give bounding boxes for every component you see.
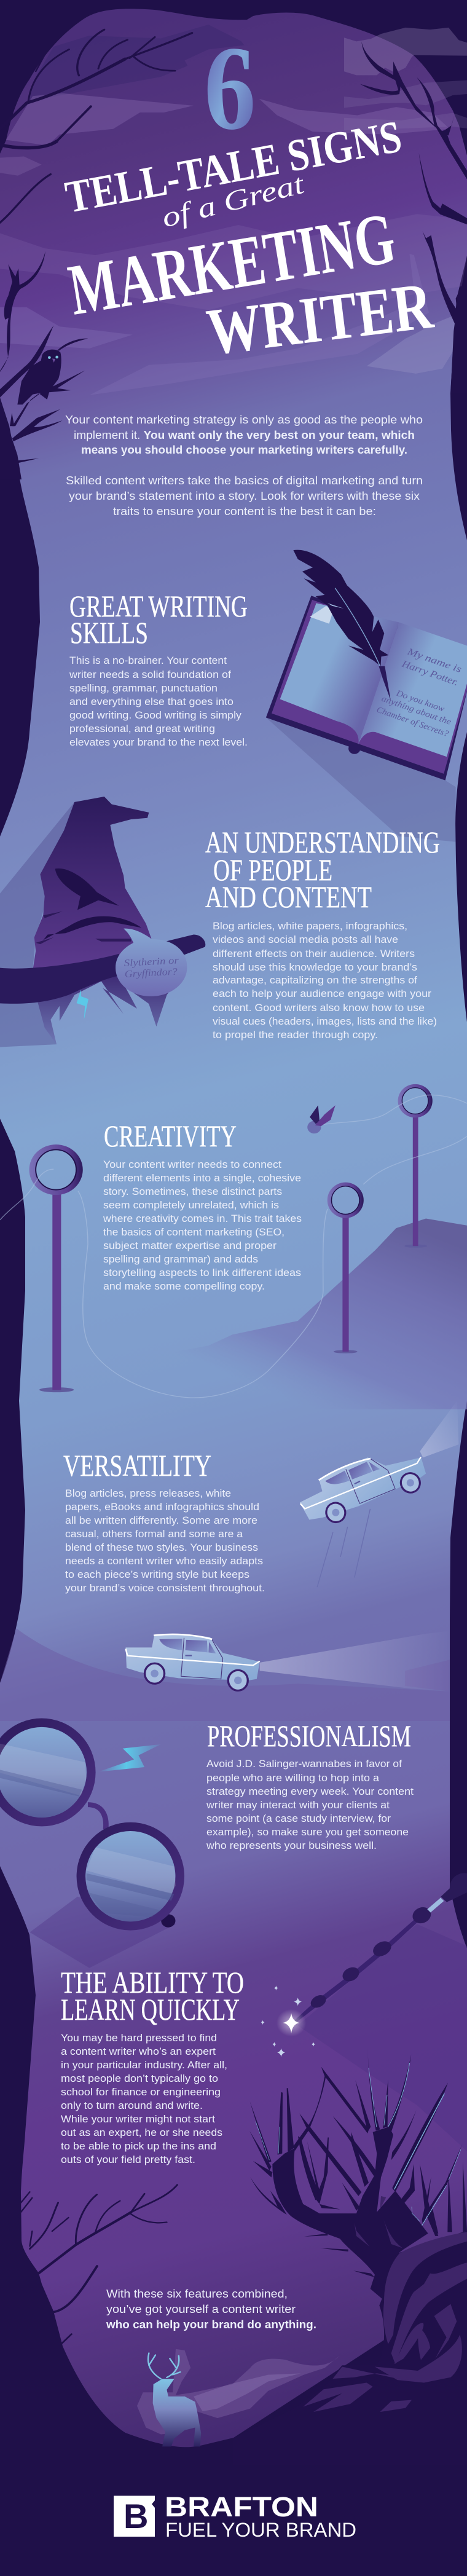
logo mark: B [124, 2497, 148, 2535]
body text: subject matter expertise and proper [103, 1240, 277, 1251]
body text: all be written differently. Some are more [65, 1515, 257, 1526]
tree: upper right branches and trunk [360, 41, 467, 393]
glowing twig highlights [256, 2063, 461, 2226]
heading: THE ABILITY TO [61, 1965, 244, 1999]
icon: wand with sparkles [261, 1873, 467, 2151]
body text: different effects on their audience. Writers [213, 948, 415, 959]
body text: blend of these two styles. Your business [65, 1542, 258, 1553]
body text: only to turn around and write. [61, 2100, 203, 2111]
intro text: Skilled content writers take the basics of digital marketing and turn [66, 474, 423, 487]
intro text: implement it. You want only the very best on your team, which [74, 428, 415, 441]
body text: example), so make sure you get someone [206, 1827, 409, 1838]
of a great: of a Great [159, 168, 308, 234]
heading: LEARN QUICKLY [61, 1992, 240, 2027]
body text: to each piece’s writing style but keeps [65, 1569, 249, 1580]
intro text: traits to ensure your content is the best it can be: [113, 505, 376, 518]
body text: and make some compelling copy. [103, 1281, 265, 1292]
body text [69, 655, 248, 748]
body text: papers, eBooks and infographics should [65, 1502, 259, 1513]
body text [213, 921, 437, 1041]
body text: This is a no-brainer. Your content [69, 655, 227, 666]
body text: strategy meeting every week. Your content [206, 1786, 414, 1797]
body text: your brand’s voice consistent throughout. [65, 1583, 265, 1594]
heading: OF PEOPLE [213, 853, 332, 887]
icon: flying car [294, 1433, 433, 1540]
book handwriting: My name is [406, 646, 463, 675]
body text: needs a content writer who easily adapts [65, 1556, 263, 1567]
flying car beam and streaks [317, 1401, 458, 1587]
heading: GREAT WRITING [69, 589, 248, 623]
body text [103, 1159, 302, 1292]
hill [89, 1219, 467, 1409]
hills [0, 1628, 450, 1721]
body text: to propel the reader through copy. [213, 1030, 378, 1041]
body text: outs of your field pretty fast. [61, 2154, 195, 2165]
heading: SKILLS [70, 615, 148, 650]
icon: owl [17, 350, 61, 404]
intro text: your brand’s statement into a story. Look for writers with these six [69, 489, 420, 502]
body text: different elements into a single, cohesive [103, 1173, 301, 1184]
heading: CREATIVITY [104, 1119, 237, 1153]
closing text: you’ve got yourself a content writer [106, 2302, 296, 2315]
body text [206, 1759, 414, 1851]
panel: great writing skills [69, 550, 467, 842]
heading [205, 825, 440, 914]
speech bubble text: Gryffindor? [124, 967, 178, 980]
body text: While your writer might not start [61, 2114, 215, 2125]
body text: and everything else that goes into [69, 696, 234, 707]
intro text: means you should choose your marketing writers carefully. [81, 443, 407, 456]
body text: Blog articles, white papers, infographics, [213, 921, 407, 932]
body text: most people don’t typically go to [61, 2073, 218, 2084]
root overlays [303, 2196, 467, 2412]
body text: story. Sometimes, these distinct parts [103, 1186, 282, 1197]
body text: writer needs a solid foundation of [69, 669, 231, 680]
tree and owl: left [0, 251, 88, 479]
body text: where creativity comes in. This trait takes [103, 1213, 302, 1224]
icon: sorting hat [0, 797, 205, 1047]
tree: lower left [21, 2185, 177, 2344]
body text: Blog articles, press releases, white [65, 1488, 231, 1499]
book handwriting: Do you know [394, 688, 446, 714]
body text: content. Good writers also know how to use [213, 1002, 425, 1014]
body text: out as an expert, he or she needs [61, 2127, 222, 2138]
panel: professionalism [0, 1719, 414, 1968]
body text: You may be hard pressed to find [61, 2033, 217, 2044]
body text: some point (a case study interview, for [206, 1813, 391, 1824]
body text: visual cues (headers, images, lists and the like) [213, 1016, 437, 1027]
icon: book and quill [266, 550, 467, 842]
heading: AND CONTENT [205, 880, 372, 914]
body text: seem completely unrelated, which is [103, 1200, 279, 1211]
clouds: upper right fog [344, 28, 467, 374]
body text: spelling and grammar) and adds [103, 1254, 258, 1265]
book handwriting: anything about the [380, 695, 452, 727]
heading [61, 1965, 244, 2027]
quidditch hoops [29, 1084, 433, 1392]
logo mark [114, 2495, 155, 2537]
body text: who represents your business well. [206, 1840, 377, 1851]
tree: whomping willow [234, 2049, 467, 2465]
icon: patronus stag [137, 2349, 340, 2446]
closing text [106, 2287, 316, 2331]
icon: glasses [0, 1719, 184, 1968]
body text: in your particular industry. After all, [61, 2060, 227, 2071]
icon: driving car [126, 1631, 450, 1692]
number 6: 6 [204, 21, 256, 155]
title [61, 21, 437, 369]
tell-tale signs: TELL-TALE SIGNS [61, 111, 406, 223]
panel: ability to learn quickly [61, 1873, 467, 2165]
body text: professional, and great writing [69, 723, 215, 735]
body text: Your content writer needs to connect [103, 1159, 281, 1170]
logo: brafton [114, 2491, 356, 2541]
body text [61, 2033, 227, 2165]
speech bubble text: Slytherin or [124, 955, 179, 969]
body text: casual, others formal and some are a [65, 1529, 243, 1540]
panel: versatility [0, 1401, 458, 1721]
panel: creativity [0, 1084, 467, 1409]
tagline: FUEL YOUR BRAND [165, 2519, 356, 2541]
body text: storytelling aspects to link different ideas [103, 1267, 301, 1278]
intro text [65, 413, 423, 518]
tree branches [0, 251, 88, 479]
body text: good writing. Good writing is simply [69, 710, 242, 721]
body text: advantage, capitalizing on the strengths of [213, 975, 417, 986]
body text: a content writer who’s an expert [61, 2046, 216, 2057]
tree: upper left [0, 30, 192, 225]
body text: people who are willing to hop into a [206, 1773, 380, 1784]
body text: each to help your audience engage with your [213, 988, 432, 999]
heading: VERSATILITY [63, 1448, 211, 1483]
closing text: who can help your brand do anything. [106, 2318, 316, 2331]
clouds: header [0, 25, 467, 395]
body text: elevates your brand to the next level. [69, 737, 248, 748]
book handwriting: Chamber of Secrets? [375, 706, 450, 739]
heading [69, 589, 248, 650]
speech bubble text [124, 955, 179, 980]
body text: spelling, grammar, punctuation [69, 683, 218, 694]
body text: Avoid J.D. Salinger-wannabes in favor of [206, 1759, 402, 1770]
book handwriting [375, 646, 463, 739]
icon: lightning bolt [98, 1744, 161, 1772]
tree silhouette [234, 2049, 467, 2465]
body text: the basics of content marketing (SEO, [103, 1227, 285, 1238]
closing text: With these six features combined, [106, 2287, 288, 2300]
panel: understanding of people and content [0, 797, 440, 1047]
wordmark: BRAFTON [165, 2491, 318, 2523]
icon: golden snitch [307, 1105, 336, 1133]
body text: to be able to pick up the ins and [61, 2141, 216, 2152]
body text: should use this knowledge to your brand’s [213, 962, 417, 973]
intro text: Your content marketing strategy is only as good as the people who [65, 413, 423, 426]
snitch flight path [0, 1095, 467, 1398]
body text: school for finance or engineering [61, 2087, 221, 2098]
body text: videos and social media posts all have [213, 934, 398, 945]
body text: writer may interact with your clients at [206, 1800, 390, 1811]
body text [65, 1488, 265, 1594]
book handwriting: Harry Potter. [400, 658, 460, 688]
